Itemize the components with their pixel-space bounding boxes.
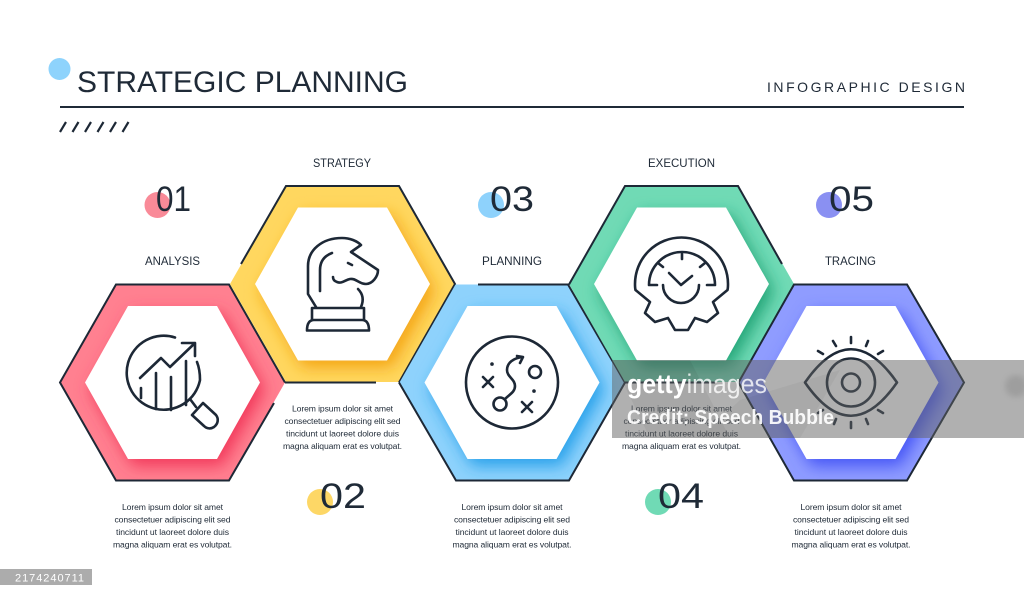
hexagon: blue	[400, 284, 624, 480]
hexagon outline	[399, 284, 625, 480]
hexagon outline	[569, 186, 782, 284]
number 02	[307, 477, 366, 516]
watermark credit: Credit: Speech Bubble	[627, 407, 834, 429]
number 01: 01	[156, 180, 191, 219]
hexagon: green	[569, 186, 794, 382]
icon: game plan	[466, 336, 558, 428]
body text	[452, 502, 572, 550]
number 04: 04	[658, 477, 704, 516]
panel: analysis	[60, 180, 285, 550]
heading: PLANNING	[482, 254, 542, 268]
body text: consectetuer adipiscing elit sed	[454, 514, 570, 524]
body text	[622, 404, 741, 451]
body text: consectetuer adipiscing elit sed	[624, 416, 740, 426]
body text: magna aliquam erat es volutpat.	[283, 441, 402, 451]
number 02: 02	[320, 477, 366, 516]
body text: Lorem ipsum dolor sit amet	[800, 502, 902, 512]
panel: strategy	[230, 156, 455, 516]
heading: EXECUTION	[648, 156, 715, 170]
hexagon outline	[738, 284, 964, 480]
title accent dot	[48, 58, 70, 80]
icon: magnifier chart	[127, 336, 218, 428]
body text	[283, 404, 402, 451]
body text: Lorem ipsum dolor sit amet	[122, 502, 224, 512]
heading: TRACING	[825, 254, 876, 268]
body text	[792, 502, 910, 550]
hexagon: purple	[738, 284, 964, 480]
body text	[113, 502, 232, 550]
body text: magna aliquam erat es volutpat.	[452, 540, 572, 550]
panel: execution	[569, 156, 794, 516]
image id tag: 2174240711	[15, 572, 84, 584]
icon: chess knight	[307, 238, 378, 330]
icon: clock gear	[635, 238, 728, 330]
hexagon: yellow	[230, 186, 455, 382]
number 03	[478, 180, 534, 219]
hexagon outline	[60, 284, 285, 480]
body text: tincidunt ut laoreet dolore duis	[116, 527, 229, 537]
body text: tincidunt ut laoreet dolore duis	[625, 428, 738, 438]
watermark logo: gettyimages	[627, 369, 767, 399]
body text: tincidunt ut laoreet dolore duis	[456, 527, 568, 537]
body text: tincidunt ut laoreet dolore duis	[286, 428, 399, 438]
number 04	[645, 477, 704, 516]
body text: tincidunt ut laoreet dolore duis	[794, 527, 908, 537]
title: STRATEGIC PLANNING	[77, 66, 408, 99]
hexagon: red	[60, 284, 285, 480]
image id tag	[0, 569, 92, 585]
panel: planning	[399, 180, 625, 550]
body text: Lorem ipsum dolor sit amet	[292, 404, 394, 414]
body text: consectetuer adipiscing elit sed	[284, 416, 401, 426]
watermark band	[612, 360, 1024, 438]
body text: Lorem ipsum dolor sit amet	[462, 502, 563, 512]
number 03: 03	[490, 180, 534, 219]
panel: tracing	[738, 180, 964, 550]
body text: magna aliquam erat es volutpat.	[792, 540, 910, 550]
number 05: 05	[829, 180, 874, 219]
slash decoration	[60, 122, 128, 132]
heading: STRATEGY	[313, 156, 371, 170]
heading: ANALYSIS	[145, 254, 200, 268]
body text: consectetuer adipiscing elit sed	[114, 514, 231, 524]
header rule	[60, 106, 964, 108]
subtitle: INFOGRAPHIC DESIGN	[767, 79, 965, 95]
body text: magna aliquam erat es volutpat.	[113, 540, 232, 550]
body text: magna aliquam erat es volutpat.	[622, 441, 741, 451]
body text: consectetuer adipiscing elit sed	[793, 514, 909, 524]
number 01	[144, 180, 191, 219]
hexagon outline	[241, 186, 455, 382]
number 05	[816, 180, 874, 219]
body text: Lorem ipsum dolor sit amet	[631, 404, 733, 414]
icon: eye	[805, 337, 897, 428]
